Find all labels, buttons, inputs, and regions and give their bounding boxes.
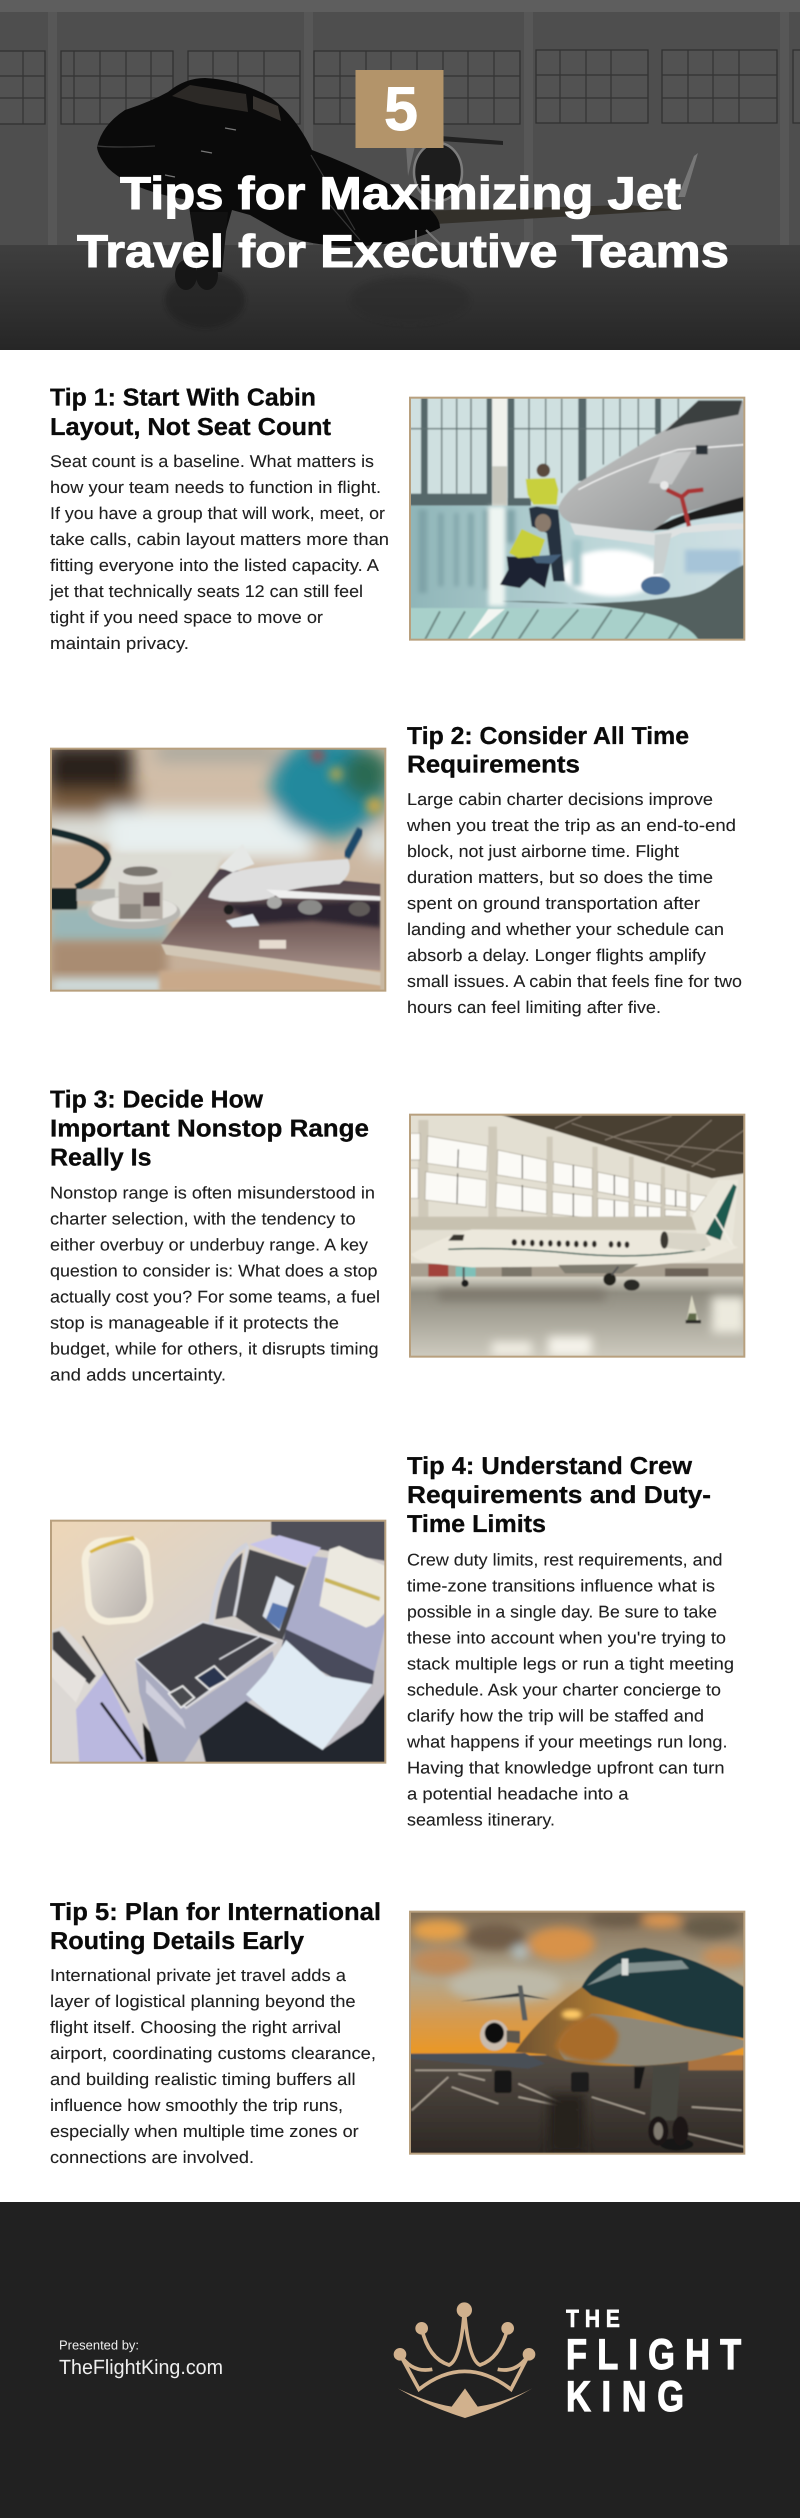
presented by text: TheFlightKing.com xyxy=(59,2356,223,2379)
tip 5 body text: layer of logistical planning beyond the xyxy=(50,1992,356,2011)
tip 4 body text: Having that knowledge upfront can turn xyxy=(407,1758,724,1778)
tip 1 heading xyxy=(50,384,331,441)
panel: tip 4 xyxy=(46,1453,734,1830)
tip 2 body text: small issues. A cabin that feels fine for two xyxy=(407,972,742,991)
number badge xyxy=(356,70,444,148)
tip 3 body text: actually cost you? For some teams, a fuel xyxy=(50,1288,380,1306)
title: Tips for Maximizing Jet xyxy=(120,167,681,219)
header banner with jet in hangar xyxy=(0,0,800,350)
tip 4 body text: what happens if your meetings run long. xyxy=(406,1732,728,1752)
tip 1 body text: Seat count is a baseline. What matters is xyxy=(50,452,374,471)
tip 4 body text: clarify how the trip will be staffed and xyxy=(407,1706,704,1726)
tip 2 body text: Large cabin charter decisions improve xyxy=(407,790,713,809)
tip 4 heading: Requirements and Duty- xyxy=(407,1482,711,1509)
tip 4 body text xyxy=(406,1550,734,1830)
tip 2 photo: stethoscope, model plane and passport xyxy=(50,748,386,992)
tip 5 body text: and building realistic timing buffers all xyxy=(50,2070,356,2089)
logo wordmark: KING xyxy=(566,2373,684,2421)
tip 3 heading: Really Is xyxy=(50,1144,152,1172)
tip 2 heading xyxy=(407,723,689,778)
tip 2 body text: landing and whether your schedule can xyxy=(407,920,724,939)
number badge: 5 xyxy=(384,75,418,144)
tip 4 heading xyxy=(407,1453,711,1538)
tip 3 body text: and adds uncertainty. xyxy=(50,1366,226,1384)
tip 1 body text: jet that technically seats 12 can still feel xyxy=(49,582,363,601)
tip 1 body text: take calls, cabin layout matters more than xyxy=(50,530,389,549)
tip 2 body text: hours can feel limiting after five. xyxy=(407,998,661,1017)
tip 2 body text: spent on ground transportation after xyxy=(407,894,700,913)
tip 2 body text: absorb a delay. Longer flights amplify xyxy=(407,946,707,965)
title: Travel for Executive Teams xyxy=(77,225,729,277)
tip 4 body text: a potential headache into a xyxy=(407,1784,629,1804)
tip 2 body text: block, not just airborne time. Flight xyxy=(407,842,679,861)
tip 5 body text: International private jet travel adds a xyxy=(50,1966,347,1985)
panel: tip 3 xyxy=(50,1086,750,1384)
tip 4 body text: schedule. Ask your charter concierge to xyxy=(407,1680,721,1700)
title xyxy=(77,167,729,277)
tip 5 body text: especially when multiple time zones or xyxy=(50,2122,359,2141)
tip 3 heading xyxy=(50,1086,369,1172)
logo wordmark: THE xyxy=(566,2305,620,2333)
tip 2 body text: when you treat the trip as an end-to-end xyxy=(406,816,736,835)
tip 3 body text: charter selection, with the tendency to xyxy=(50,1210,356,1228)
panel: tip 2 xyxy=(46,723,742,1017)
tip 4 heading: Tip 4: Understand Crew xyxy=(407,1453,693,1480)
tip 3 body text: question to consider is: What does a stop xyxy=(50,1262,377,1280)
tip 5 body text xyxy=(50,1966,376,2167)
tip 4 body text: seamless itinerary. xyxy=(407,1810,555,1830)
tip 1 body text xyxy=(49,452,389,653)
tip 1 body text: how your team needs to function in flight. xyxy=(50,478,381,497)
tip 4 body text: Crew duty limits, rest requirements, and xyxy=(407,1550,722,1570)
tip 4 body text: possible in a single day. Be sure to take xyxy=(407,1602,717,1622)
tip 3 body text: either overbuy or underbuy range. A key xyxy=(50,1236,369,1254)
tip 3 body text: Nonstop range is often misunderstood in xyxy=(50,1184,375,1202)
logo wordmark xyxy=(566,2305,741,2421)
icon: crown logo xyxy=(394,2302,536,2418)
tip 3 photo: jet parked in hangar xyxy=(409,1114,746,1358)
tip 2 heading: Tip 2: Consider All Time xyxy=(407,723,689,750)
tip 1 heading: Layout, Not Seat Count xyxy=(50,414,331,441)
tip 1 body text: tight if you need space to move or xyxy=(50,608,323,627)
tip 5 body text: connections are involved. xyxy=(50,2148,254,2167)
tip 3 body text xyxy=(50,1184,380,1384)
tip 4 photo: private cabin seat with pillow xyxy=(50,1520,386,1764)
tip 2 heading: Requirements xyxy=(407,752,580,778)
tip 4 body text: time-zone transitions influence what is xyxy=(407,1576,715,1596)
tip 1 photo: crew inspecting jet nose in hangar xyxy=(409,396,746,641)
tip 4 body text: stack multiple legs or run a tight meeting xyxy=(407,1654,734,1674)
tip 5 heading: Tip 5: Plan for International xyxy=(50,1899,381,1926)
tip 3 body text: budget, while for others, it disrupts timing xyxy=(50,1340,379,1358)
tip 3 heading: Tip 3: Decide How xyxy=(50,1086,264,1114)
tip 5 body text: flight itself. Choosing the right arrival xyxy=(50,2018,341,2037)
tip 5 body text: influence how smoothly the trip runs, xyxy=(50,2096,343,2115)
panel: tip 5 xyxy=(50,1899,750,2167)
tip 1 body text: fitting everyone into the listed capacity. A xyxy=(50,556,380,575)
logo wordmark: FLIGHT xyxy=(566,2331,741,2379)
tip 4 heading: Time Limits xyxy=(407,1511,546,1538)
tip 3 body text: stop is manageable if it protects the xyxy=(50,1314,339,1332)
tip 1 heading: Tip 1: Start With Cabin xyxy=(50,384,316,412)
tip 4 body text: these into account when you're trying to xyxy=(407,1628,726,1648)
tip 3 heading: Important Nonstop Range xyxy=(50,1116,369,1142)
tip 2 body text: duration matters, but so does the time xyxy=(407,868,713,887)
tip 1 body text: If you have a group that will work, meet, or xyxy=(50,504,385,523)
footer band xyxy=(0,2202,800,2518)
presented by text xyxy=(59,2338,223,2379)
tip 5 body text: airport, coordinating customs clearance, xyxy=(50,2044,376,2063)
presented by text: Presented by: xyxy=(59,2338,139,2352)
tip 1 body text: maintain privacy. xyxy=(50,634,189,653)
tip 5 heading: Routing Details Early xyxy=(50,1928,304,1955)
tip 5 heading xyxy=(50,1899,381,1955)
tip 2 body text xyxy=(406,790,742,1017)
tip 5 photo: jet on wet apron at sunset xyxy=(409,1910,746,2155)
panel: tip 1 xyxy=(49,384,750,653)
